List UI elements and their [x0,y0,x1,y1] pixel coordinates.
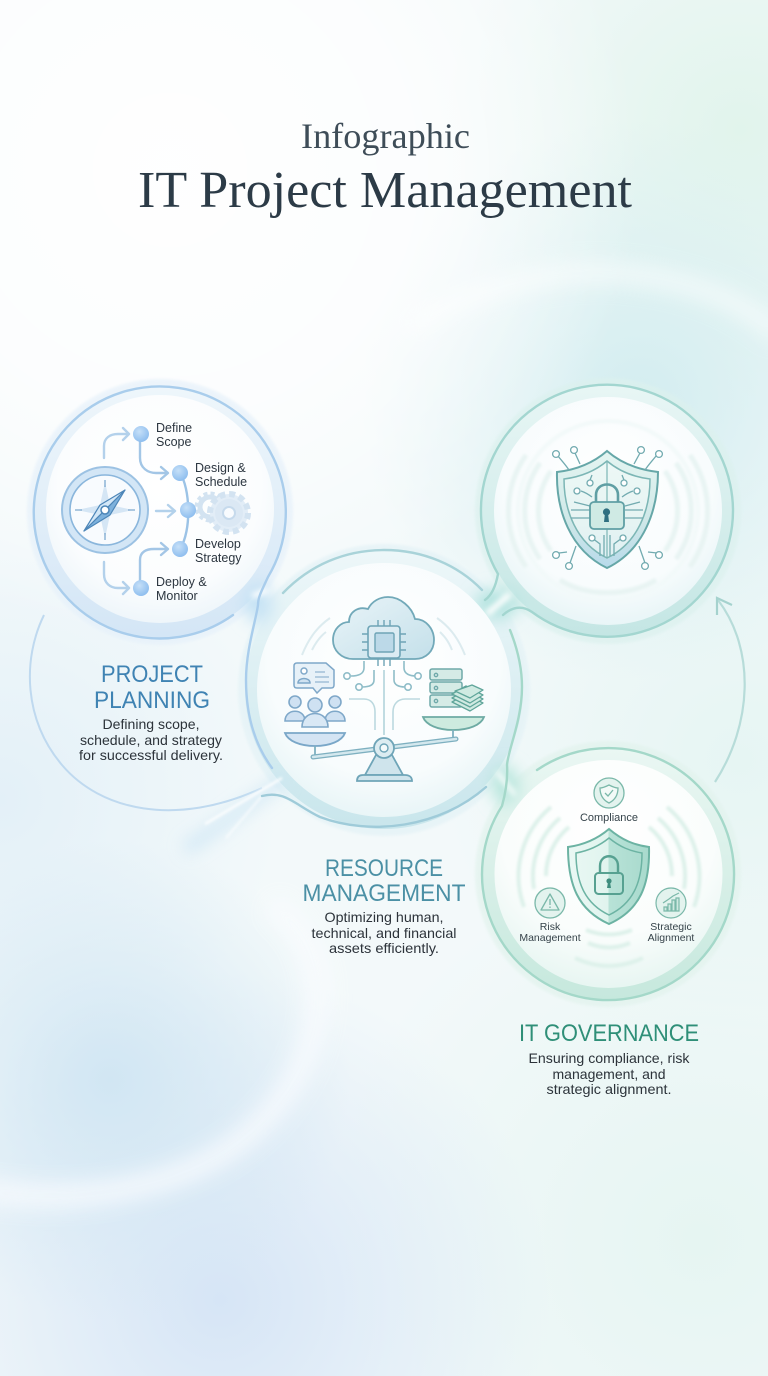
heading: project planning [94,661,210,714]
icon: servers [430,669,462,707]
label: risk management [519,921,581,944]
description: resource management: technical, and financial [312,925,456,941]
icon: compliance [594,778,624,808]
flowing connected rings [34,385,734,1000]
step labels: Monitor [156,589,198,603]
white disc [494,760,722,988]
heading: IT governance: IT GOVERNANCE [519,1020,699,1047]
label: risk management: Risk [540,921,561,933]
white disc [257,563,511,817]
label: strategic alignment: Strategic [650,921,692,933]
glass band halos [27,378,741,1007]
panel: project planning circle [46,395,274,623]
large outline behind project planning text [30,615,262,810]
label: compliance: Compliance [580,812,638,824]
circuit lines [344,661,421,735]
icon: compass [62,467,148,553]
icon: risk [535,888,565,918]
white disc [494,397,722,625]
text block: IT governance [519,1020,699,1097]
process arrows [104,428,188,594]
icon: gears [196,494,248,532]
description: project planning: schedule, and strategy [80,732,222,748]
step labels: Design & [195,461,246,475]
description: IT governance: Ensuring compliance, risk [528,1050,691,1066]
icon: cloud with chip [333,597,434,666]
title line: Infographic: Infographic [301,116,470,156]
icon: central shield with lock [568,829,649,924]
title line: IT Project Management: IT Project Management [138,162,633,219]
arrow: cycle back to governance [715,598,745,782]
icon: contact card [294,663,334,693]
description: resource management: assets efficiently. [329,940,439,956]
icon: circuit shield with lock [553,447,662,569]
icon: people [285,696,345,727]
step labels: Scope [156,435,191,449]
heading: project planning: PLANNING [94,687,210,714]
step labels: Develop [195,537,241,551]
description: project planning: Defining scope, [102,716,200,732]
faint arcs [302,618,465,655]
step labels: Schedule [195,475,247,489]
description: resource management [312,909,456,956]
step labels [156,421,247,603]
step labels: Deploy & [156,575,207,589]
panel: IT governance pillars circle [494,760,722,988]
heading: resource management: RESOURCE [325,855,443,882]
icon: strategic chart [656,888,686,918]
panel: resource management circle [257,563,511,817]
heading: project planning: PROJECT [101,661,203,688]
junction glows [185,583,519,850]
white disc [46,395,274,623]
description: IT governance: management, and [552,1066,666,1082]
process nodes [133,426,196,596]
label: strategic alignment [648,921,694,944]
text block: resource management [302,855,466,956]
description: IT governance [528,1050,691,1097]
heading: resource management [302,855,466,907]
text block: project planning [79,661,223,763]
description: resource management: Optimizing human, [324,909,444,925]
description: project planning [79,716,223,763]
icon: balance scale [285,717,484,781]
panel: IT governance security circle [494,397,722,625]
label: strategic alignment: Alignment [648,932,694,944]
ripple arcs [519,807,699,966]
ripple arcs [508,421,708,601]
step labels: Strategy [195,551,242,565]
icon: cash stack [452,685,483,711]
label: risk management: Management [519,932,581,944]
description: project planning: for successful delivery. [79,747,223,763]
title [138,116,633,219]
description: IT governance: strategic alignment. [546,1081,672,1097]
heading: resource management: MANAGEMENT [302,880,466,907]
step labels: Define [156,421,192,435]
